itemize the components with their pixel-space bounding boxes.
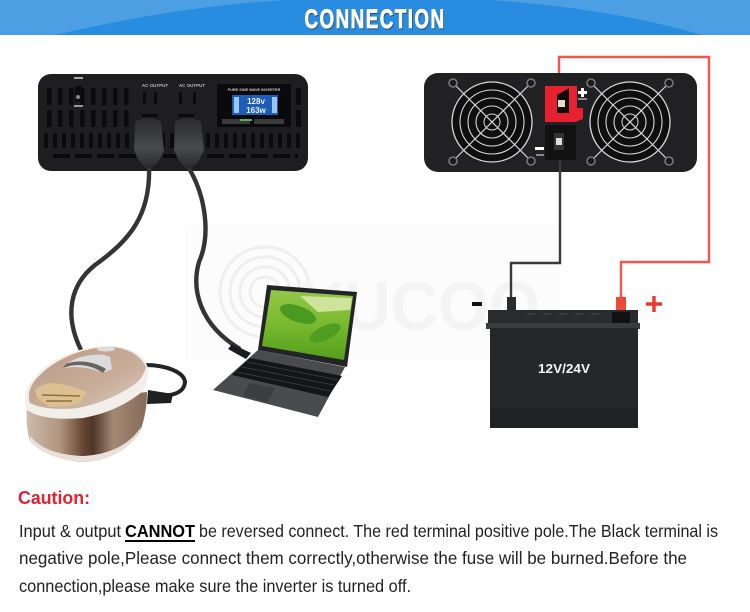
negative post [507,297,516,310]
left fan [449,79,535,165]
laptop screen [258,285,357,367]
caution text: Input & output [19,521,121,541]
front inverter panel: AC OUTPUT [179,83,205,88]
power cable to laptop [187,165,240,349]
watermark: YUCOO [300,267,540,345]
caution text: connection,please make sure the inverter is turned off. [19,576,411,596]
lcd display panel: PURE SINE WAVE INVERTER [228,88,281,92]
laptop plug [228,344,251,359]
lcd display panel: 128v [247,97,265,106]
cooker lid rim [25,346,148,419]
positive terminal [545,86,587,122]
caution text: negative pole,Please connect them correctly,otherwise the fuse will be burned.Before the [19,548,687,568]
caution text: be reversed connect. The red terminal positive pole.The Black terminal is [199,521,718,541]
cooker lid top [29,347,146,409]
title: CONNECTION [304,4,446,34]
battery voltage label: 12V/24V [538,362,591,376]
ac output labels: AC OUTPUT [142,83,168,88]
caution heading: Caution: [18,488,90,508]
battery [486,297,640,428]
cooker control panel [35,383,87,407]
power switch [74,77,83,107]
positive post [616,297,626,310]
plus sign [646,296,662,312]
rice cooker [25,346,185,462]
lcd display panel [217,84,291,127]
laptop base [213,350,345,417]
cooker rear cable [145,365,185,396]
power cable to rice cooker [71,165,149,350]
ac plugs [134,118,204,168]
front inverter panel [38,74,308,171]
rear inverter panel [424,73,697,172]
ac sockets [142,92,196,117]
caution text [19,521,718,596]
minus sign [472,302,482,306]
cooker handle [63,355,112,373]
lcd display panel: 163w [246,106,267,115]
right fan [587,79,673,165]
negative terminal [535,125,576,160]
laptop [213,285,357,417]
watermark [185,225,560,360]
red positive wire [559,57,709,300]
header banner [0,0,750,35]
cooker body [27,392,147,462]
caution text: CANNOT [125,521,195,541]
black negative wire [511,160,560,300]
